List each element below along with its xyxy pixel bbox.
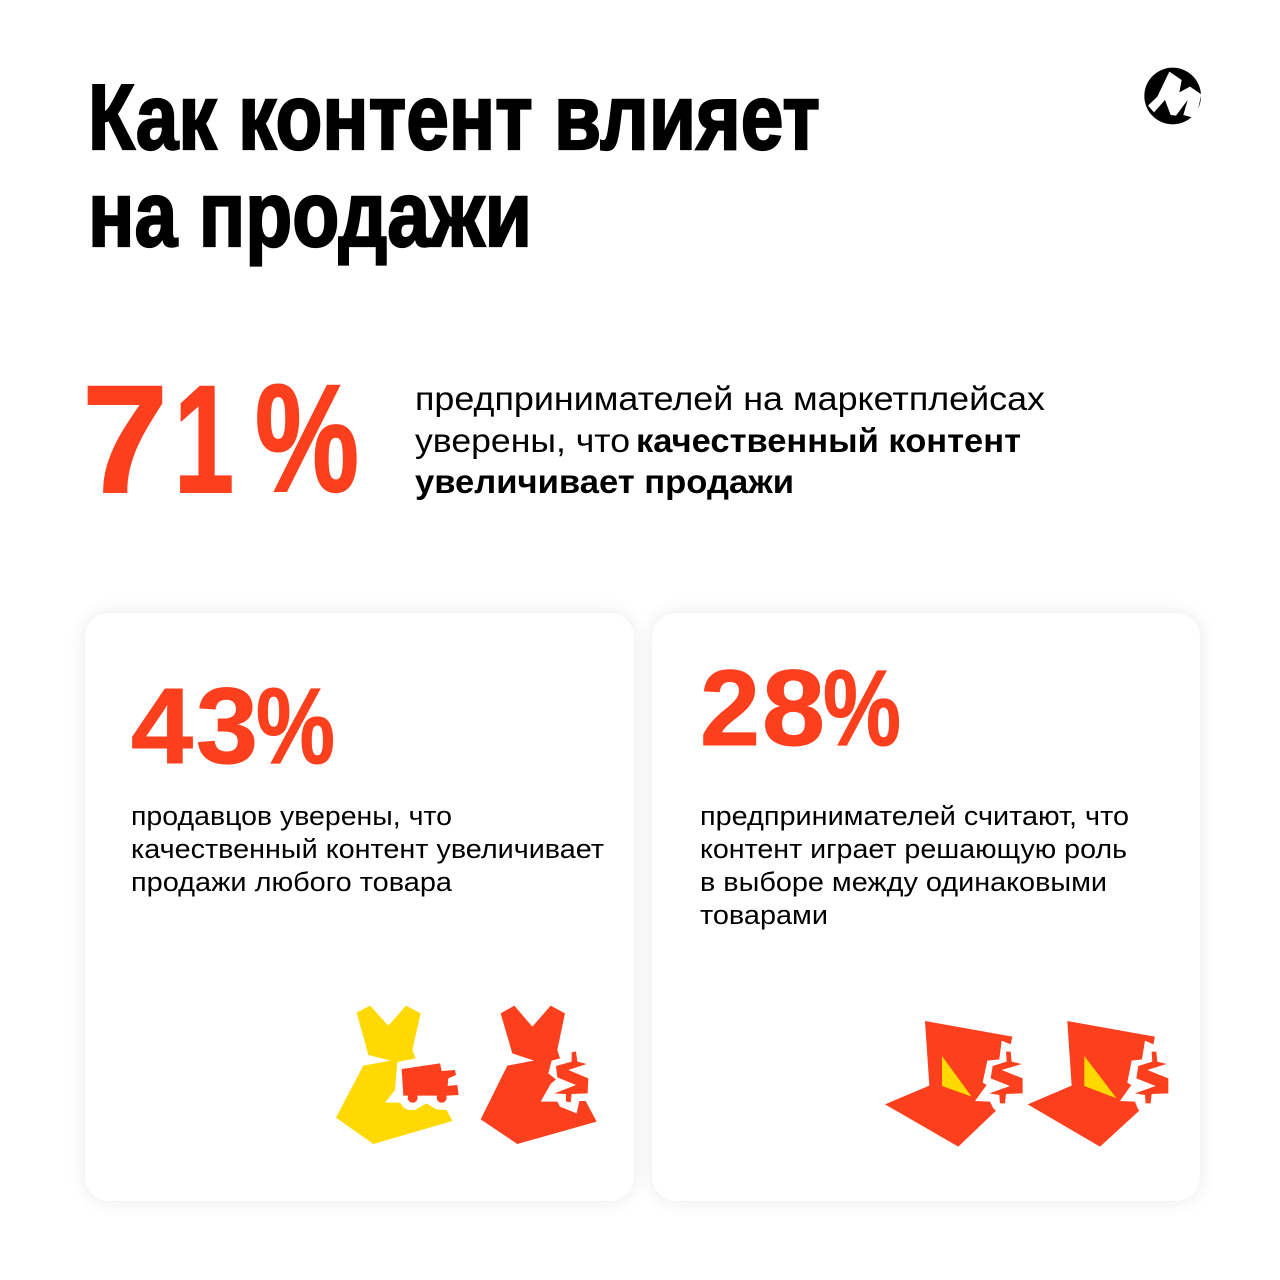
card stat: 28%	[700, 647, 901, 768]
icon: laptop with dollar, right	[1028, 1021, 1168, 1147]
card text: 28% description	[700, 801, 1129, 930]
headline stat: 71%: 1	[174, 354, 234, 525]
card stat: 43%: 3	[196, 665, 258, 786]
panel: right card background	[652, 613, 1200, 1201]
card stat: 28%: %	[823, 647, 901, 768]
card text: 43% description: продавцов уверены, что	[131, 801, 452, 831]
card stat: 43%	[131, 665, 335, 786]
headline description: предпринимателей на маркетплейсах	[415, 380, 1046, 417]
card stat: 28%: 8	[762, 647, 825, 768]
headline description: увеличивает продажи	[415, 463, 794, 500]
card text: 43% description	[131, 801, 604, 897]
headline stat: 71%	[82, 353, 359, 525]
icon: yellow dress with truck	[336, 1006, 459, 1144]
card text: 43% description: продажи любого товара	[131, 867, 453, 897]
headline description: уверены, что	[415, 422, 630, 459]
title: Как контент влияет	[88, 65, 820, 169]
card text: 28% description: в выборе между одинаковыми	[700, 867, 1107, 897]
card text: 28% description: контент играет решающую роль	[700, 834, 1127, 864]
icon: red dress with dollar	[481, 1006, 597, 1144]
card stat: 43%: %	[256, 665, 335, 786]
title: на продажи	[88, 162, 532, 266]
icon: Market logo	[1144, 68, 1201, 124]
card text: 28% description: товарами	[700, 900, 828, 930]
headline description	[415, 380, 1046, 500]
card text: 28% description: предпринимателей считают, что	[700, 801, 1129, 831]
card stat: 43%: 4	[131, 665, 193, 786]
headline stat: 71%: %	[255, 353, 359, 524]
card text: 43% description: качественный контент увеличивает	[131, 834, 604, 864]
headline stat: 71%: 7	[82, 354, 168, 525]
title	[88, 65, 820, 266]
card stat: 28%: 2	[700, 647, 760, 768]
panel: left card background	[85, 613, 634, 1201]
headline description: качественный контент	[636, 422, 1021, 459]
icon: laptop with dollar, left	[885, 1021, 1023, 1147]
